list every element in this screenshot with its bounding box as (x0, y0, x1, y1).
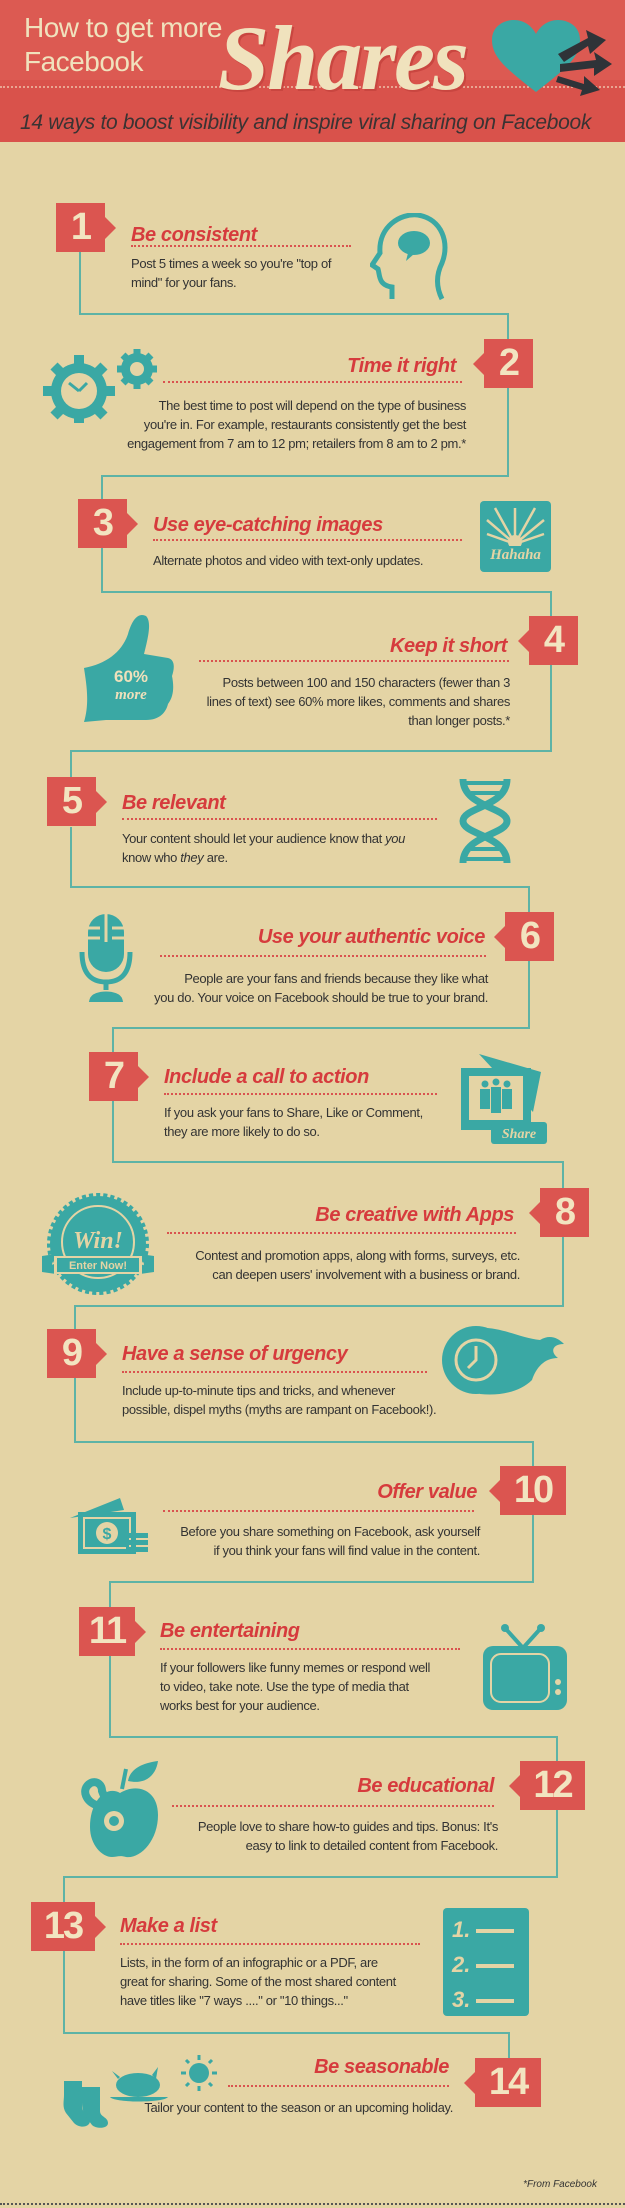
icon: win badge: Enter Now! (69, 1260, 127, 1272)
number box 3: 3 (93, 502, 112, 544)
icon: money (70, 1498, 148, 1554)
body 1 (131, 256, 332, 290)
step 11 (79, 1607, 567, 1713)
step 3 (78, 499, 551, 572)
icon: share photo: Share (502, 1127, 536, 1142)
title: Shares: Shares (218, 7, 467, 109)
title 5: Be relevant (122, 792, 225, 814)
icon: TV (483, 1624, 567, 1710)
body 1: Post 5 times a week so you're "top of (131, 256, 331, 271)
number box 12: 12 (533, 1764, 572, 1806)
body 8 (195, 1248, 520, 1282)
number box 14: 14 (489, 2061, 527, 2103)
step 6 (80, 912, 554, 1005)
body 12: easy to link to detailed content from Facebook. (246, 1838, 498, 1853)
body 2: engagement from 7 am to 12 pm; retailers from 8 am to 2 pm.* (127, 436, 466, 451)
icon: numbered list (443, 1908, 529, 2016)
number box 10: 10 (514, 1469, 552, 1511)
title 3: Use eye-catching images (153, 514, 383, 536)
body 11: If your followers like funny memes or respond well (160, 1660, 430, 1675)
step 10 (70, 1466, 566, 1558)
body 13 (120, 1955, 396, 2008)
icon: Hahaha picture: Hahaha (490, 547, 541, 563)
icon: heart with share arrows (492, 20, 612, 96)
body 7: If you ask your fans to Share, Like or Comment, (164, 1105, 423, 1120)
header banner (0, 0, 625, 142)
icon: numbered list: 3. (452, 1987, 470, 2012)
number box 11 (79, 1607, 135, 1656)
number box 4 (529, 616, 578, 665)
step 4 (84, 615, 578, 728)
body 4: than longer posts.* (408, 713, 510, 728)
number box 6: 6 (520, 915, 539, 957)
number box 10 (500, 1466, 566, 1515)
number box 2 (484, 339, 533, 388)
icon: share photo (461, 1054, 547, 1144)
step 5 (47, 777, 510, 865)
title 6: Use your authentic voice (258, 926, 485, 948)
body 4: Posts between 100 and 150 characters (fewer than 3 (223, 675, 510, 690)
icon: gears with clock (43, 349, 157, 423)
number box 11: 11 (89, 1610, 125, 1652)
body 12 (198, 1819, 498, 1853)
icon: apple with worm (81, 1761, 158, 1858)
title 8: Be creative with Apps (315, 1204, 514, 1226)
title 10: Offer value (377, 1481, 477, 1503)
step 12 (81, 1761, 585, 1858)
number box 7 (89, 1052, 138, 1101)
title 11: Be entertaining (160, 1620, 300, 1642)
icon: DNA (460, 779, 510, 863)
icon: numbered list: 2. (452, 1952, 470, 1977)
number box 1 (56, 203, 105, 252)
step 1 (56, 203, 448, 300)
body 5 (122, 831, 406, 865)
body 10 (180, 1524, 480, 1558)
icon: win badge: Win! (73, 1228, 123, 1254)
body 6 (154, 971, 488, 1005)
body 2 (127, 398, 466, 451)
body 4: lines of text) see 60% more likes, comments and shares (207, 694, 510, 709)
body 5: know who they are. (122, 850, 228, 865)
body 1: mind" for your fans. (131, 275, 236, 290)
body 8: Contest and promotion apps, along with forms, surveys, etc. (195, 1248, 520, 1263)
body 3: Alternate photos and video with text-only updates. (153, 553, 423, 568)
title: how to get more facebook: Facebook (24, 46, 143, 77)
number box 12 (520, 1761, 585, 1810)
body 5: Your content should let your audience know that you (122, 831, 405, 846)
icon: Hahaha picture (480, 501, 551, 572)
title 12: Be educational (357, 1775, 494, 1797)
body 9: Include up-to-minute tips and tricks, and whenever (122, 1383, 395, 1398)
number box 2: 2 (499, 342, 518, 384)
body 11: to video, take note. Use the type of media that (160, 1679, 409, 1694)
body 13: Lists, in the form of an infographic or a PDF, are (120, 1955, 378, 1970)
icon: head with speech bubble (370, 213, 448, 300)
step 9 (47, 1326, 564, 1417)
body 13: great for sharing. Some of the most shared content (120, 1974, 396, 1989)
number box 8 (540, 1188, 589, 1237)
step 7 (89, 1052, 547, 1144)
body 12: People love to share how-to guides and tips. Bonus: It's (198, 1819, 498, 1834)
title 7: Include a call to action (164, 1066, 369, 1088)
icon: numbered list: 1. (452, 1917, 470, 1942)
icon: microphone (80, 914, 132, 1002)
footnote: *From Facebook (523, 2179, 597, 2190)
title: how to get more facebook (24, 12, 222, 77)
icon: thumbs up 60% more (84, 615, 174, 722)
number box 4: 4 (544, 619, 563, 661)
body 9: possible, dispel myths (myths are rampant on Facebook!). (122, 1402, 436, 1417)
icon: win badge (42, 1193, 154, 1295)
step 4: 60% (114, 667, 148, 686)
number box 14 (475, 2058, 541, 2107)
icon: money: $ (103, 1526, 112, 1543)
subtitle: 14 ways to boost visibility and inspire viral sharing on Facebook (20, 111, 591, 134)
header lower band (0, 80, 625, 142)
body 13: have titles like "7 ways ...." or "10 things..." (120, 1993, 348, 2008)
number box 7: 7 (104, 1055, 123, 1097)
icon: flaming clock (442, 1326, 564, 1394)
number box 13: 13 (44, 1905, 82, 1947)
body 8: can deepen users' involvement with a business or brand. (212, 1267, 520, 1282)
body 10: if you think your fans will find value in the content. (213, 1543, 480, 1558)
title 9: Have a sense of urgency (122, 1343, 347, 1365)
step 4: more (115, 687, 147, 703)
step 8 (42, 1188, 589, 1295)
number box 1: 1 (71, 206, 90, 248)
number box 9 (47, 1329, 96, 1378)
title 2: Time it right (347, 355, 456, 377)
icon: socks turkey sun (64, 2055, 217, 2128)
body 6: People are your fans and friends because they like what (184, 971, 488, 986)
body 6: you do. Your voice on Facebook should be true to your brand. (154, 990, 488, 1005)
step 13 (31, 1902, 529, 2016)
body 2: The best time to post will depend on the type of business (159, 398, 466, 413)
number box 5: 5 (62, 780, 81, 822)
body 2: you're in. For example, restaurants consistently get the best (144, 417, 466, 432)
number box 13 (31, 1902, 95, 1951)
number box 8: 8 (555, 1191, 574, 1233)
title 13: Make a list (120, 1915, 217, 1937)
body 7: they are more likely to do so. (164, 1124, 320, 1139)
title 14: Be seasonable (314, 2056, 449, 2078)
title 1: Be consistent (131, 224, 257, 246)
step 14 (64, 2055, 541, 2128)
step 2 (43, 339, 533, 451)
body 9 (122, 1383, 436, 1417)
body 10: Before you share something on Facebook, ask yourself (180, 1524, 480, 1539)
body 4 (207, 675, 510, 728)
body 11: works best for your audience. (160, 1698, 320, 1713)
number box 5 (47, 777, 96, 826)
number box 6 (505, 912, 554, 961)
title 4: Keep it short (390, 635, 507, 657)
title: how to get more facebook: How to get more (24, 12, 222, 43)
number box 9: 9 (62, 1332, 81, 1374)
body 7 (164, 1105, 423, 1139)
body 14: Tailor your content to the season or an upcoming holiday. (144, 2100, 453, 2115)
body 11 (160, 1660, 430, 1713)
number box 3 (78, 499, 127, 548)
